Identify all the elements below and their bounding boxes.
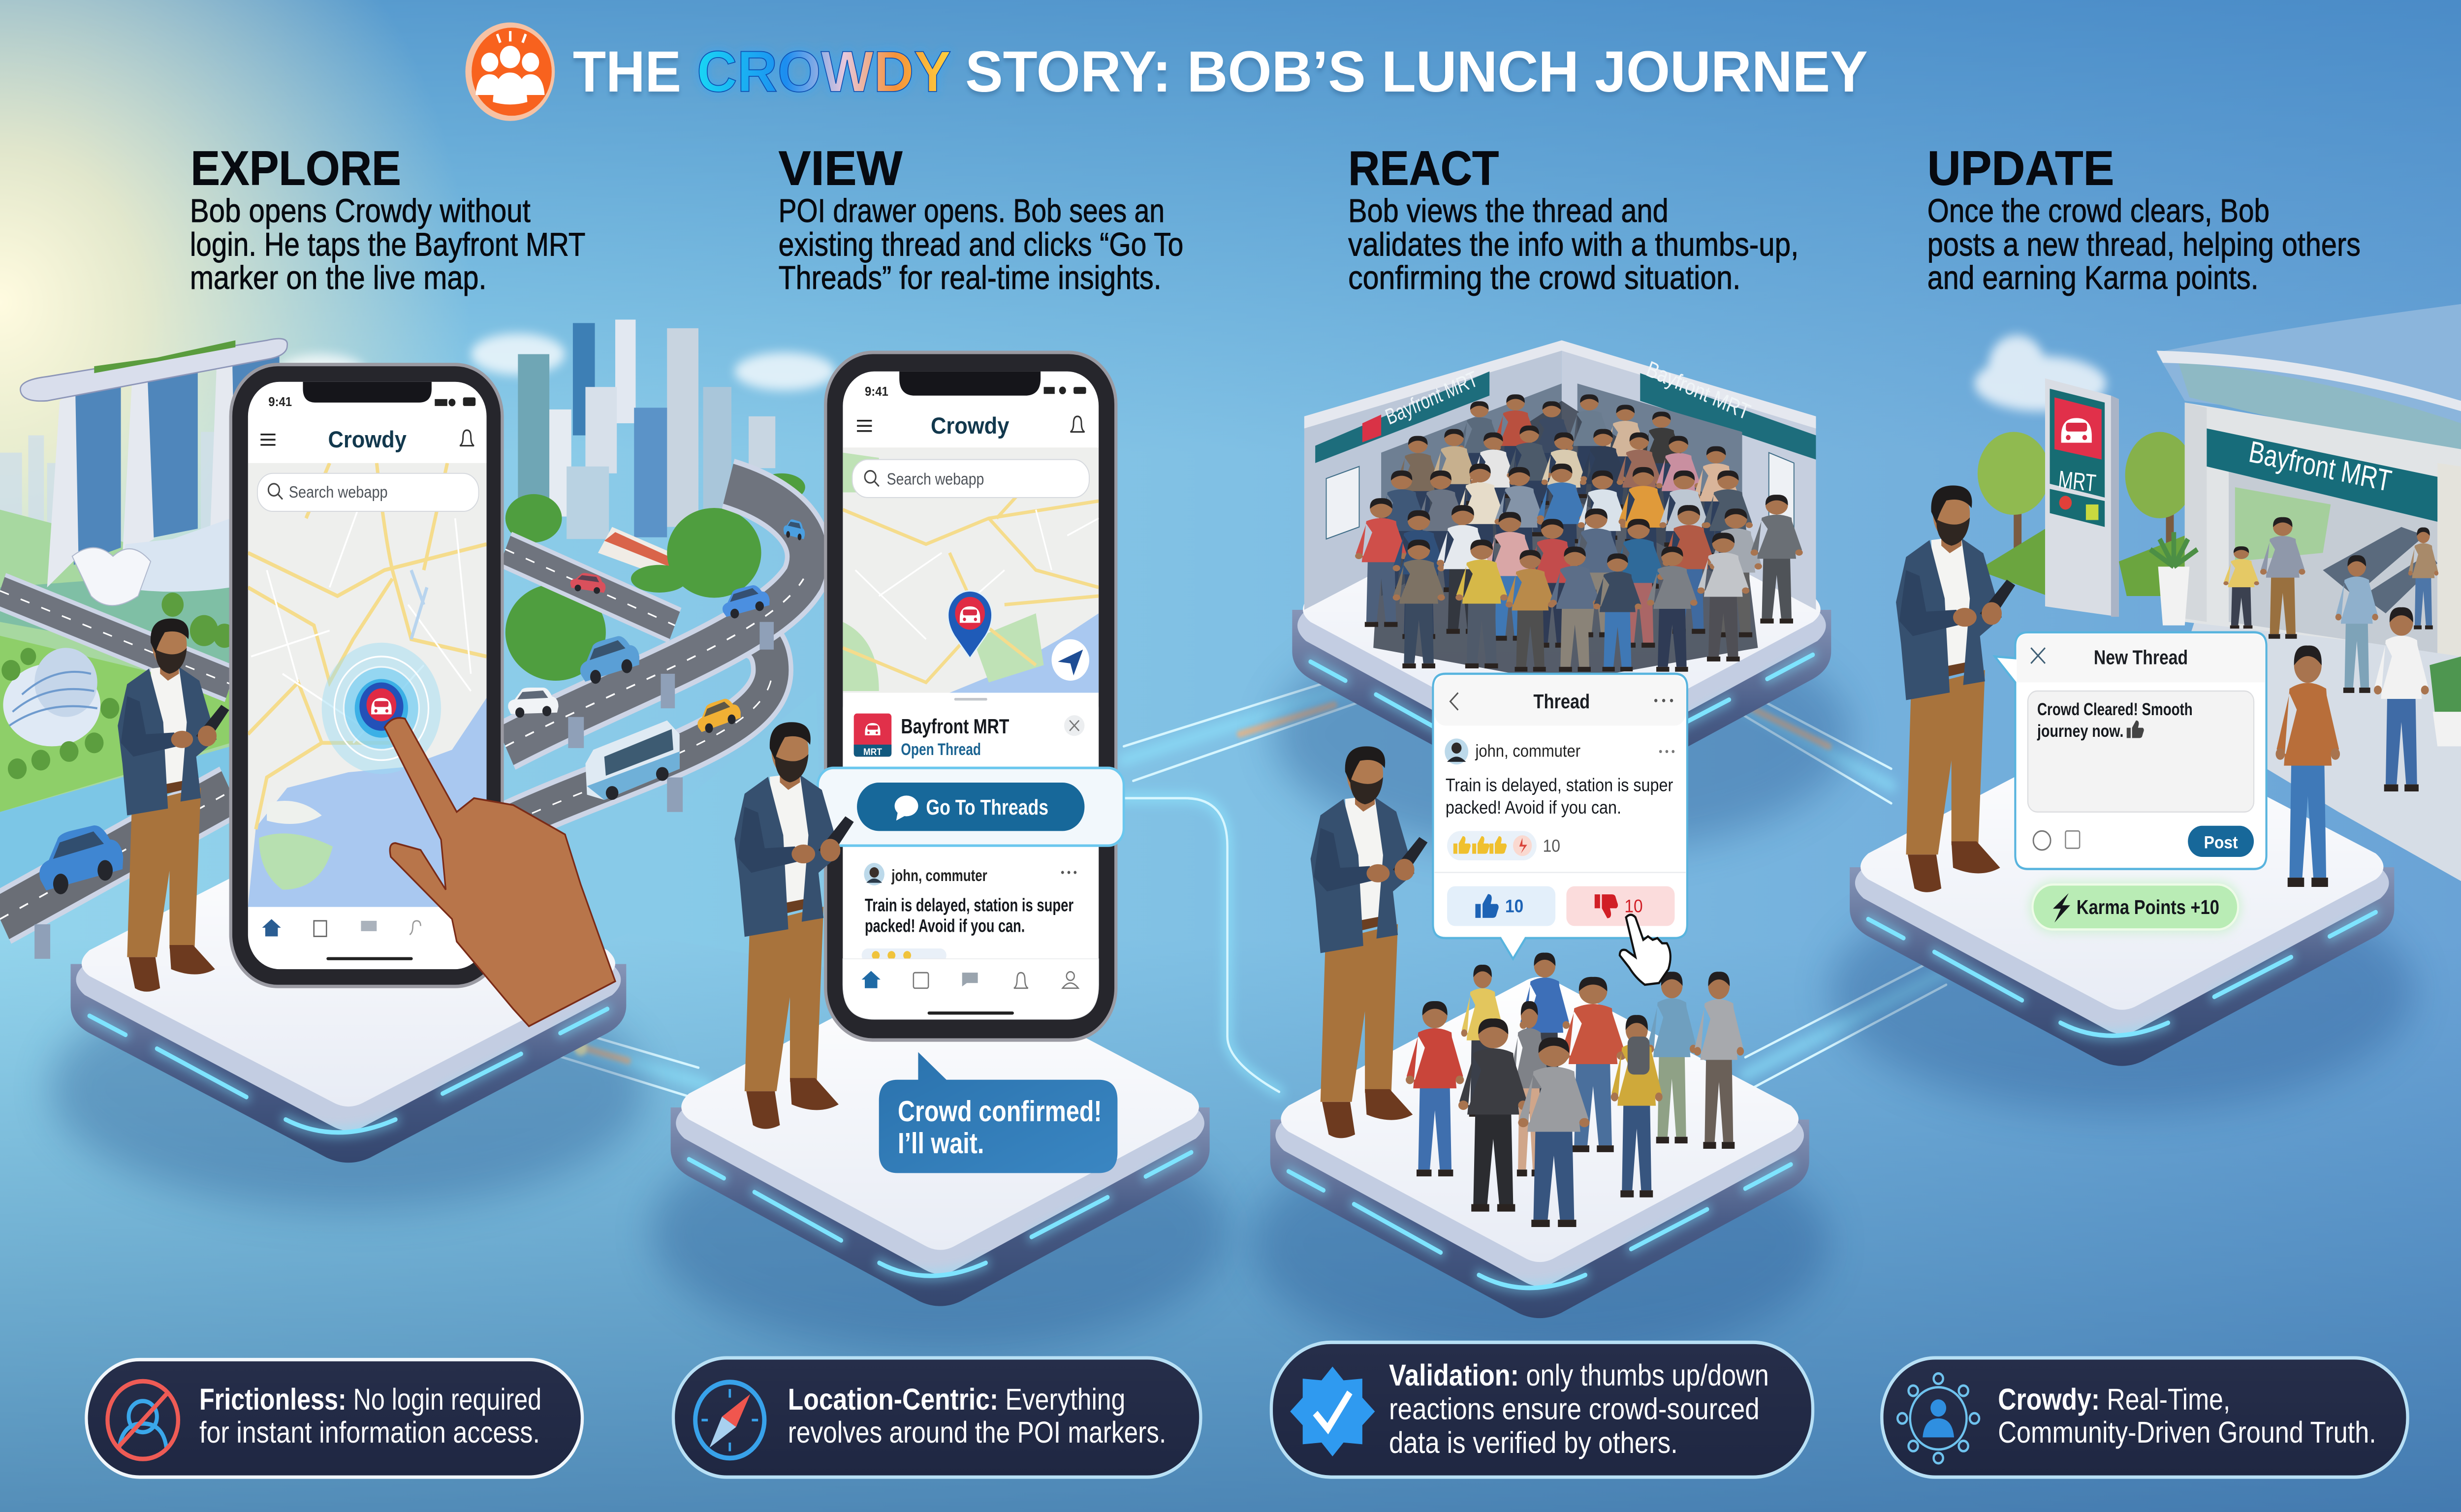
phone: view bbox=[818, 352, 1124, 1040]
buildings bbox=[518, 319, 775, 587]
callout: validation: data is verified by others. bbox=[1389, 1426, 1678, 1460]
poi drawer: Open Thread bbox=[901, 739, 981, 758]
title text: CROWDY bbox=[697, 39, 951, 104]
comment bbox=[1445, 739, 1674, 818]
title text: STORY: BOB’S LUNCH JOURNEY bbox=[965, 39, 1868, 104]
locate button bbox=[1051, 639, 1089, 681]
step text: view: VIEW bbox=[779, 141, 903, 195]
character: bob reacting bbox=[1311, 746, 1427, 1138]
flyer dome bbox=[3, 648, 100, 746]
callout: location-centric bbox=[673, 1358, 1200, 1477]
thread preview: john, commuter bbox=[891, 866, 987, 884]
callout: validation: reactions ensure crowd-sourced bbox=[1389, 1392, 1760, 1426]
step text: update: posts a new thread, helping others bbox=[1927, 226, 2361, 263]
comment: Train is delayed, station is super bbox=[1446, 775, 1673, 795]
thread preview bbox=[862, 863, 1076, 962]
step text: react bbox=[1348, 141, 1798, 296]
callout: location-centric: Location-Centric: Everything bbox=[788, 1383, 1125, 1417]
thread preview: Train is delayed, station is super bbox=[865, 895, 1073, 915]
speech bubble: I’ll wait. bbox=[898, 1127, 984, 1160]
callout: validation bbox=[1271, 1342, 1813, 1477]
distant skyline bbox=[0, 432, 223, 549]
title text: THE bbox=[573, 39, 681, 104]
icon: no login bbox=[107, 1381, 178, 1459]
step text: view: Threads” for real-time insights. bbox=[779, 259, 1162, 296]
icon: verified badge bbox=[1290, 1366, 1375, 1456]
cursor hand bbox=[1620, 915, 1671, 985]
left trees bbox=[1, 593, 235, 779]
callout: location-centric: revolves around the POI markers. bbox=[788, 1416, 1166, 1449]
map bbox=[843, 447, 1099, 693]
people on platform bbox=[1406, 953, 1744, 1227]
city trees bbox=[505, 473, 805, 681]
card header: New Thread bbox=[2094, 647, 2188, 669]
step text: react: validates the info with a thumbs-up, bbox=[1348, 226, 1798, 263]
platform: update bbox=[1830, 724, 2414, 1112]
step text: update bbox=[1927, 141, 2361, 296]
plaza floor bbox=[2166, 613, 2461, 881]
card header: Thread bbox=[1533, 691, 1590, 713]
comment: john, commuter bbox=[1475, 742, 1580, 761]
icon: community network bbox=[1897, 1373, 1979, 1463]
step text: react: REACT bbox=[1348, 141, 1499, 195]
mrt totem: MRT bbox=[2057, 466, 2097, 497]
character: bob viewing bbox=[734, 722, 854, 1129]
station scene: update bbox=[1978, 304, 2461, 881]
step text: explore: marker on the live map. bbox=[190, 259, 487, 296]
bottom nav bbox=[262, 919, 421, 960]
step text: explore: EXPLORE bbox=[190, 141, 401, 195]
step text: react: confirming the crowd situation. bbox=[1348, 259, 1740, 296]
composer icons bbox=[2033, 831, 2080, 850]
left ground bbox=[0, 509, 231, 847]
text area: Crowd Cleared! Smooth bbox=[2037, 700, 2193, 720]
callout: crowdy bbox=[1882, 1358, 2408, 1477]
character: bob exploring bbox=[118, 619, 229, 992]
crowd bbox=[1355, 394, 1803, 682]
comment: packed! Avoid if you can. bbox=[1446, 798, 1621, 818]
thumbs down button: 10 bbox=[1624, 896, 1643, 916]
thread card bbox=[1433, 674, 1687, 959]
clouds bbox=[278, 333, 2106, 411]
search bar bbox=[257, 473, 479, 511]
platform: view bbox=[651, 965, 1230, 1353]
step text: explore: Bob opens Crowdy without bbox=[190, 192, 531, 229]
search bar: Search webapp bbox=[289, 483, 388, 501]
thumbs up button: 10 bbox=[1505, 896, 1523, 916]
speech bubble: Crowd confirmed! bbox=[898, 1095, 1102, 1128]
callout: frictionless bbox=[86, 1359, 582, 1477]
step text: react: Bob views the thread and bbox=[1348, 192, 1669, 229]
station scene: crowded mrt bbox=[1304, 340, 1816, 682]
icon: crowdy logo bbox=[465, 23, 555, 121]
text area bbox=[2028, 691, 2254, 812]
thread preview: packed! Avoid if you can. bbox=[865, 916, 1025, 936]
search bar: Search webapp bbox=[887, 470, 984, 488]
city scene bbox=[0, 319, 2106, 985]
status bar: 9:41 bbox=[865, 384, 888, 399]
poi drawer: MRT bbox=[863, 746, 883, 757]
thumbs down button bbox=[1566, 886, 1674, 926]
vehicles bbox=[35, 517, 806, 899]
roads bbox=[0, 484, 809, 919]
card header bbox=[1435, 675, 1686, 725]
callout: frictionless: for instant information access. bbox=[199, 1416, 540, 1449]
station walls: Bayfront MRT bbox=[1383, 367, 1481, 430]
app header bbox=[260, 426, 474, 453]
title text: THE bbox=[573, 42, 681, 107]
character: bob updating bbox=[1896, 485, 2015, 892]
commuters bbox=[2223, 517, 2461, 791]
map marker ripple bbox=[322, 643, 441, 774]
title bbox=[465, 23, 1868, 121]
woman walking bbox=[2275, 645, 2340, 887]
step text: view: existing thread and clicks “Go To bbox=[779, 226, 1183, 263]
callout: validation: Validation: only thumbs up/down bbox=[1389, 1359, 1769, 1392]
speech bubble bbox=[879, 1052, 1117, 1173]
platform: station bbox=[1272, 467, 1851, 855]
step text: explore bbox=[190, 141, 585, 296]
step text: explore: login. He taps the Bayfront MRT bbox=[190, 226, 585, 263]
convention hall and museum bbox=[118, 518, 231, 592]
map bbox=[248, 463, 487, 907]
plant bbox=[2150, 532, 2197, 626]
station building bbox=[2156, 304, 2461, 657]
marina bay sands bbox=[20, 339, 287, 587]
road pillars bbox=[34, 622, 774, 959]
poi drawer: Bayfront MRT bbox=[901, 715, 1009, 738]
go to threads bar: Go To Threads bbox=[926, 795, 1048, 819]
trees bbox=[1978, 432, 2194, 596]
map pin bbox=[948, 591, 992, 658]
platform: react bbox=[1250, 977, 1829, 1365]
go to threads bar bbox=[818, 768, 1124, 846]
karma points badge: Karma Points +10 bbox=[2077, 896, 2219, 918]
app header bbox=[857, 412, 1084, 439]
reaction summary: 10 bbox=[1543, 837, 1560, 856]
phone: explore bbox=[231, 365, 502, 986]
text area: journey now. bbox=[2037, 722, 2123, 741]
search bar bbox=[852, 460, 1089, 498]
callout: frictionless: Frictionless: No login required bbox=[199, 1383, 541, 1417]
callout: crowdy: Crowdy: Real-Time, bbox=[1998, 1383, 2230, 1417]
app header: Crowdy bbox=[931, 412, 1009, 439]
status bar: 9:41 bbox=[268, 395, 292, 409]
post button bbox=[2188, 826, 2254, 857]
connectors: light streams bbox=[518, 665, 1954, 1097]
mrt totem bbox=[2045, 378, 2119, 617]
icon: compass bbox=[695, 1382, 764, 1458]
station walls bbox=[1304, 340, 1816, 610]
callout: crowdy: Community-Driven Ground Truth. bbox=[1998, 1416, 2376, 1449]
title text: STORY: BOB’S LUNCH JOURNEY bbox=[965, 42, 1868, 107]
hand tapping marker bbox=[384, 718, 615, 1026]
station walls: Bayfront MRT bbox=[1643, 357, 1753, 425]
card header bbox=[2017, 634, 2265, 682]
right water bbox=[505, 691, 825, 985]
station building: Bayfront MRT bbox=[2246, 435, 2394, 498]
step text: update: and earning Karma points. bbox=[1927, 259, 2259, 296]
reaction summary bbox=[1447, 831, 1560, 860]
step text: update: Once the crowd clears, Bob bbox=[1927, 192, 2270, 229]
title text: CROWDY bbox=[697, 39, 951, 104]
title text bbox=[573, 39, 1868, 107]
karma points badge bbox=[2029, 881, 2241, 933]
post button: Post bbox=[2204, 833, 2238, 852]
step text: update: UPDATE bbox=[1927, 141, 2114, 195]
platform: explore bbox=[50, 821, 647, 1209]
thumbs up button bbox=[1447, 886, 1555, 926]
status bar bbox=[865, 384, 1086, 399]
new thread card bbox=[1995, 632, 2267, 869]
bottom nav bbox=[843, 959, 1099, 1019]
status bar bbox=[268, 395, 475, 409]
poi drawer bbox=[843, 693, 1099, 959]
app header: Crowdy bbox=[328, 426, 407, 453]
step text: view bbox=[779, 141, 1183, 296]
step text: view: POI drawer opens. Bob sees an bbox=[779, 192, 1165, 229]
